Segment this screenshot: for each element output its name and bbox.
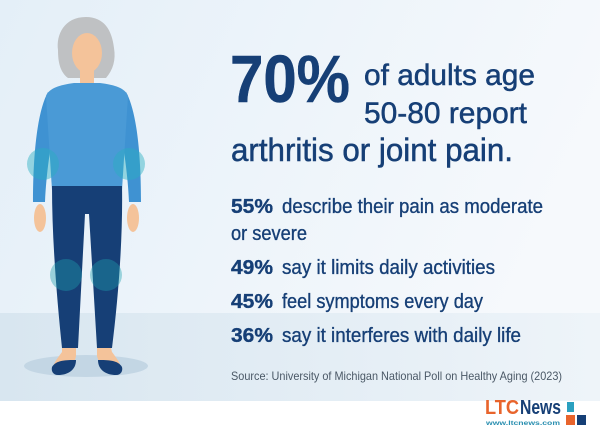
stats list: describe their pain as moderate xyxy=(282,196,543,218)
joint highlights xyxy=(27,148,59,180)
headline: of adults age xyxy=(364,59,535,92)
arms xyxy=(33,92,60,202)
hair xyxy=(58,17,115,78)
stats list: say it limits daily activities xyxy=(282,257,495,279)
feet xyxy=(53,348,76,373)
stats list: or severe xyxy=(231,223,307,245)
shirt xyxy=(46,83,128,193)
logo: LTC News: www.ltcnews.com xyxy=(485,421,560,427)
figure: woman xyxy=(24,17,148,377)
stats list: say it interferes with daily life xyxy=(282,325,521,347)
logo: LTC News: LTC xyxy=(485,397,519,419)
face xyxy=(72,33,102,73)
pants xyxy=(52,186,122,348)
source: Source: University of Michigan National Poll on Healthy Aging (2023) xyxy=(231,369,562,383)
stats list: 36% xyxy=(231,325,273,347)
headline: arthritis or joint pain. xyxy=(231,132,513,168)
hands xyxy=(34,204,46,232)
stats list xyxy=(231,196,543,347)
logo: LTC News xyxy=(485,397,586,427)
stats list: 45% xyxy=(231,291,273,313)
stats list: 49% xyxy=(231,257,273,279)
headline: 50-80 report xyxy=(364,97,528,130)
headline xyxy=(230,42,535,168)
stats list: 55% xyxy=(231,196,273,218)
logo: LTC News: News xyxy=(520,397,561,419)
floor band xyxy=(0,313,600,401)
headline: 70% xyxy=(230,42,350,117)
stats list: feel symptoms every day xyxy=(282,291,483,313)
